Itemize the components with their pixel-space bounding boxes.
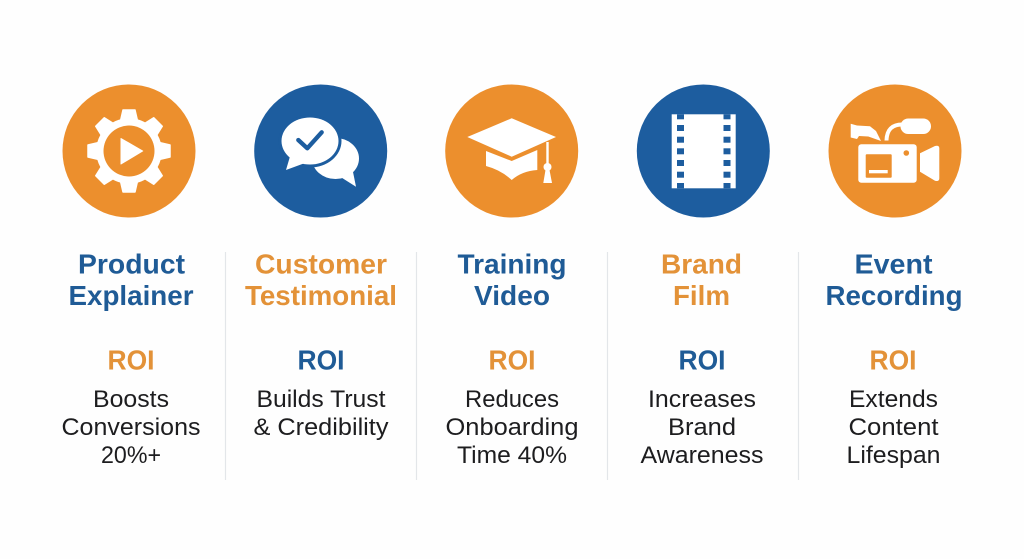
heading: Event Recording (826, 248, 962, 311)
label: ROI: ROI (488, 344, 536, 376)
text: Boosts Conversions 20%+ (62, 386, 200, 469)
text: Builds Trust & Credibility (254, 386, 389, 441)
heading: Event Recording: Recording (826, 280, 962, 311)
heading: Brand Film: Film (673, 280, 730, 311)
text: Extends Content Lifespan (846, 386, 940, 469)
heading: Event Recording: Event (854, 248, 932, 280)
text: Builds Trust & Credibility: Builds Trust (256, 386, 386, 413)
panel: Brand Film (637, 84, 770, 469)
label: ROI: ROI (108, 344, 154, 376)
text: Reduces Onboarding Time 40%: Reduces (465, 386, 559, 413)
text: Boosts Conversions 20%+: Boosts (93, 386, 169, 413)
heading: Brand Film (661, 248, 742, 311)
icon: video camera with microphone (828, 84, 962, 218)
heading: Customer Testimonial: Testimonial (245, 280, 397, 311)
heading: Brand Film: Brand (661, 248, 742, 280)
panel: Training Video (445, 84, 578, 469)
text: Extends Content Lifespan: Content (848, 414, 939, 441)
text: Increases Brand Awareness (640, 386, 764, 469)
heading: Customer Testimonial (245, 248, 397, 311)
text: Extends Content Lifespan: Lifespan (846, 442, 940, 469)
text: Boosts Conversions 20%+: Conversions (62, 414, 200, 441)
icon: speech bubbles with check mark (254, 84, 387, 218)
label: ROI: ROI (678, 344, 726, 376)
text: Reduces Onboarding Time 40%: Time 40% (457, 442, 567, 469)
text: Reduces Onboarding Time 40%: Onboarding (446, 414, 578, 441)
heading: Product Explainer (68, 248, 194, 311)
text: Builds Trust & Credibility: & Credibility (254, 414, 389, 441)
panel: Event Recording (826, 84, 962, 469)
heading: Customer Testimonial: Customer (255, 248, 387, 280)
heading: Training Video: Training (458, 248, 566, 280)
heading: Product Explainer: Explainer (68, 280, 194, 311)
text: Increases Brand Awareness: Brand (668, 414, 736, 441)
text: Increases Brand Awareness: Awareness (640, 442, 764, 469)
text: Increases Brand Awareness: Increases (648, 386, 756, 413)
text: Extends Content Lifespan: Extends (849, 386, 938, 413)
label: ROI: ROI (298, 344, 344, 376)
heading: Training Video (458, 248, 566, 311)
icon: film strip (637, 84, 770, 218)
heading: Product Explainer: Product (78, 248, 185, 280)
text: Boosts Conversions 20%+: 20%+ (101, 442, 161, 469)
label: ROI: ROI (870, 344, 916, 376)
heading: Training Video: Video (474, 280, 550, 311)
panel: Customer Testimonial (245, 84, 397, 441)
icon: graduation cap (445, 84, 578, 218)
text: Reduces Onboarding Time 40% (446, 386, 578, 469)
icon: gear with play button (62, 84, 196, 218)
panel: Product Explainer (62, 84, 200, 469)
